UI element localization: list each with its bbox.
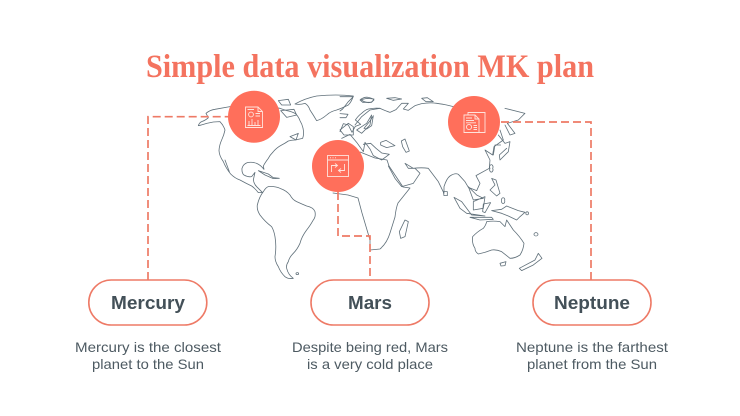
connector: Mars (338, 192, 370, 280)
description: Neptune: Neptune is the farthest (516, 339, 668, 355)
description: Mercury: Mercury is the closest (75, 339, 221, 355)
label: Neptune: Neptune (554, 293, 630, 313)
description: Neptune (516, 339, 668, 372)
icon circle: Neptune documents (448, 96, 500, 148)
connector: Mercury (148, 117, 228, 280)
card: Mercury (75, 280, 221, 372)
description: Neptune: planet from the Sun (527, 356, 657, 372)
description: Mars: Despite being red, Mars (292, 339, 448, 355)
card: Neptune (516, 280, 668, 372)
pill: Mars (311, 280, 429, 325)
description: Mars (292, 339, 448, 372)
label: Mars: Mars (348, 293, 392, 313)
connector: Neptune (501, 122, 591, 280)
description: Mercury: planet to the Sun (92, 356, 204, 372)
pill: Mercury (89, 280, 207, 325)
description: Mercury (75, 339, 221, 372)
title: Simple data visualization MK plan (146, 49, 594, 85)
world map (198, 95, 542, 279)
description: Mars: is a very cold place (307, 356, 433, 372)
pill: Neptune (533, 280, 651, 325)
icon circle: Mercury document chart (228, 91, 280, 143)
label: Mercury: Mercury (111, 293, 185, 313)
card: Mars (292, 280, 448, 372)
icon circle: Mars browser window (312, 140, 364, 192)
